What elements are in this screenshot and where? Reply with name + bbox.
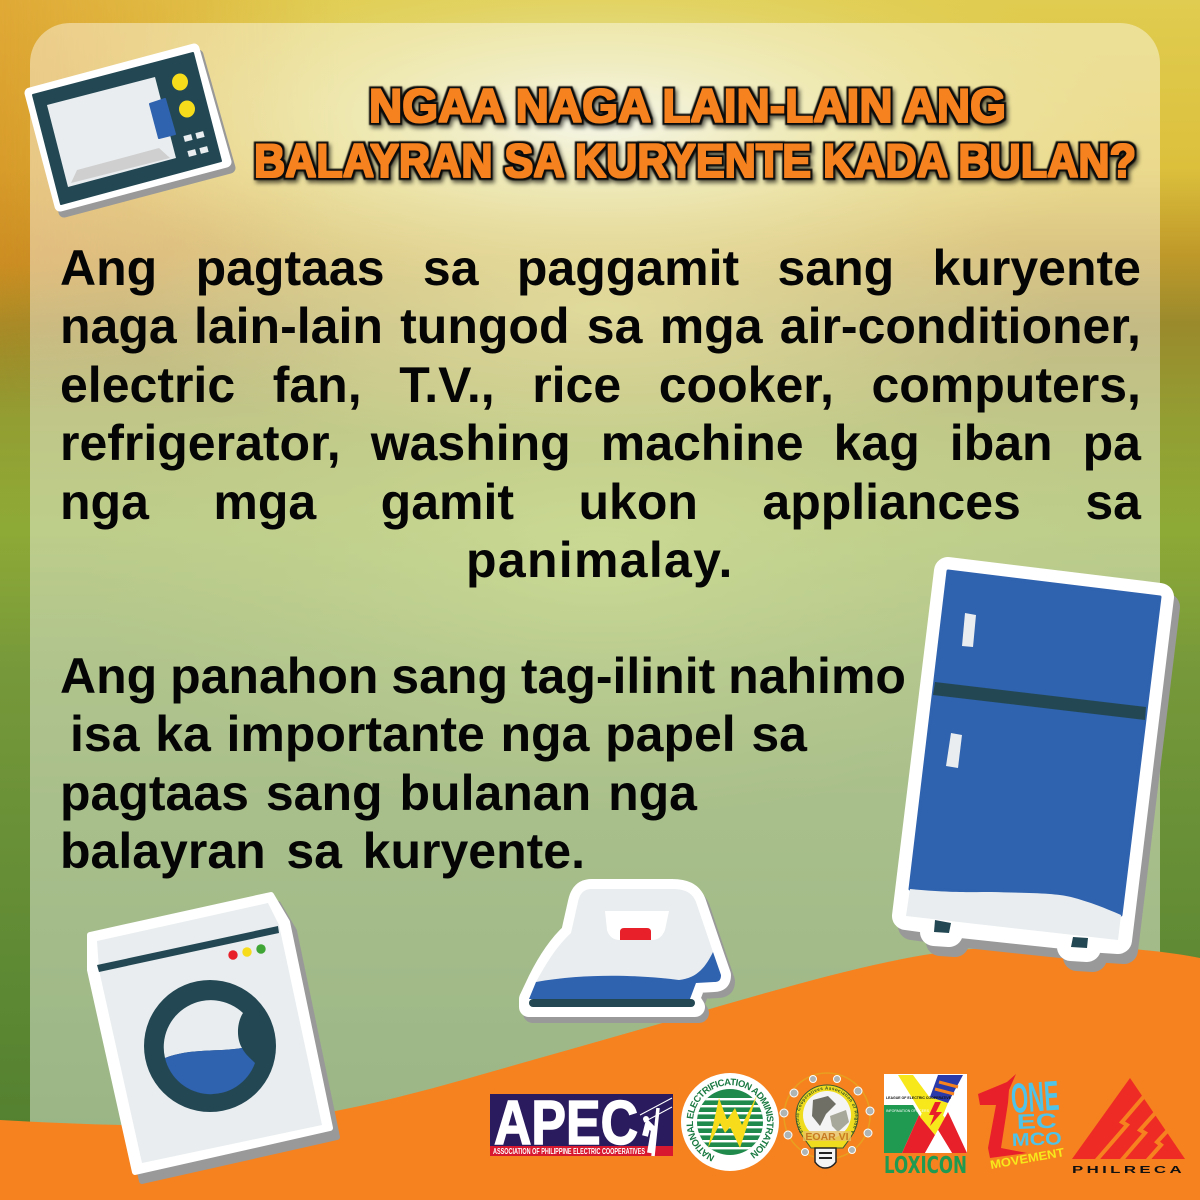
logo: Loxicon [884,1074,967,1179]
text block: paragraph two: sang [391,648,508,704]
text block: paragraph two: sa [751,706,807,762]
text block: paragraph two: balayran [60,823,266,879]
logo: 1 EC MCO Movement: ONE [1009,1072,1061,1122]
text block: paragraph two: ka [155,706,211,762]
title [254,79,1136,187]
icon: refrigerator [906,571,1166,958]
text block: paragraph two: sang [266,765,383,821]
text block: paragraph one: cooker, [659,357,834,413]
logo: EOAR VI light bulb [780,1072,874,1169]
text block: paragraph one: gamit [381,474,514,530]
text block: paragraph one: air-conditioner, [780,298,1141,354]
text block: paragraph two: panahon [170,648,378,704]
text block: paragraph one: fan, [273,357,362,413]
text block: paragraph one: sa [1085,474,1141,530]
text block: paragraph two: pagtaas [60,765,249,821]
text block: paragraph one: mga [660,298,762,354]
logo: Loxicon: INFORMATION OFFICERS [886,1109,930,1113]
logo: 1 EC MCO Movement [978,1072,1066,1172]
text block: paragraph two: tag-ilinit [521,648,715,704]
logo: APEC: APEC [494,1089,638,1158]
text block: paragraph one: machine [601,415,804,471]
text block: paragraph one: Ang [60,240,157,296]
text block: paragraph two: importante [226,706,485,762]
text block: paragraph one: nga [60,474,149,530]
text block: paragraph one: computers, [871,357,1141,413]
text block: paragraph one: tungod [400,298,570,354]
text block: paragraph one: panimalay. [466,532,734,588]
text block: paragraph two [60,648,906,879]
text block: paragraph one: appliances [762,474,1021,530]
logo: EOAR VI light bulb: Electric Cooperatives Association of Region VI [796,1086,858,1134]
icon: microwave [30,49,230,212]
title: BALAYRAN SA KURYENTE KADA BULAN? [254,134,1136,187]
text block: paragraph one: iban [950,415,1053,471]
logo: EOAR VI light bulb: EOAR VI [805,1131,849,1143]
logo: Philreca [1072,1078,1185,1176]
text block: paragraph two: nga [608,765,697,821]
title: NGAA NAGA LAIN-LAIN ANG [369,79,1006,132]
icon: washing machine [90,895,337,1181]
logo: APEC: ASSOCIATION OF PHILIPPINE ELECTRIC COOPERATIVES [493,1147,645,1156]
text block: paragraph one: sa [423,240,479,296]
text block: paragraph one: mga [213,474,316,530]
text block: paragraph two: papel [605,706,736,762]
text block: paragraph one: electric [60,357,235,413]
orange wave footer [0,945,1200,1200]
logo: Philreca: PHILRECA [1072,1165,1185,1176]
icon: clothes iron [529,889,725,1013]
logo: 1 EC MCO Movement: MCO [1011,1128,1062,1150]
text block: paragraph one: pa [1083,415,1141,471]
logo: Loxicon: LOXICON [884,1153,967,1179]
text block: paragraph one: paggamit [517,240,739,296]
logo: 1 EC MCO Movement: EC [1016,1110,1057,1134]
text block: paragraph one: kuryente [933,240,1141,296]
text block: paragraph two: nahimo [728,648,906,704]
logo: 1 EC MCO Movement: MOVEMENT [989,1145,1066,1172]
text block: paragraph one: sa [587,298,642,354]
text block: paragraph one: ukon [578,474,698,530]
text block: paragraph one: sang [777,240,894,296]
text block: paragraph two: sa [286,823,342,879]
text block: paragraph one: T.V., [399,357,495,413]
text block: paragraph one: lain-lain [194,298,383,354]
logo: Loxicon: LEAGUE OF ELECTRIC COOPERATIVE [886,1096,952,1100]
text block: paragraph two: kuryente. [363,823,585,879]
text block: paragraph two: Ang [60,648,157,704]
text block: paragraph one: kag [834,415,920,471]
text block: paragraph one: pagtaas [196,240,385,296]
text block: paragraph one [60,240,1142,588]
text block: paragraph two: isa [70,706,140,762]
text block: paragraph two: bulanan [399,765,591,821]
text block: paragraph one: refrigerator, [60,415,341,471]
text block: paragraph two: nga [501,706,589,762]
text block: paragraph one: naga [60,298,177,354]
logo: National Electrification Administration: NATIONAL ELECTRIFICATION ADMINISTRATION [686,1078,774,1162]
text block: paragraph one: washing [371,415,571,471]
text block: paragraph one: rice [532,357,621,413]
